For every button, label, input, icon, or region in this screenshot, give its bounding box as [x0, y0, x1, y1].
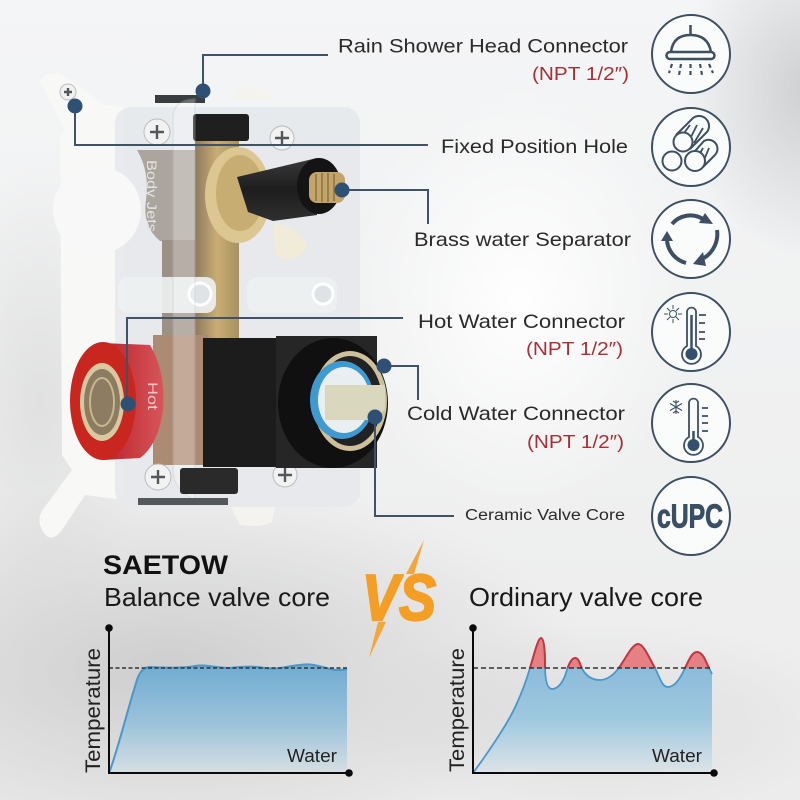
heading: SAETOW: SAETOW [103, 550, 229, 580]
label: fixed position hole: Fixed Position Hole [441, 136, 628, 158]
chart: balance valve temperature [82, 624, 353, 777]
VS emblem [362, 540, 436, 658]
label: npt cold: (NPT 1/2″) [527, 432, 624, 452]
chart: ordinary valve temperature [446, 624, 718, 777]
balance target line [109, 667, 348, 669]
icon: shower head [652, 15, 730, 93]
transparent housing [115, 107, 360, 507]
black round seat [278, 338, 388, 468]
top and bottom bracket ears [230, 87, 275, 526]
balance x label: Water [287, 746, 337, 766]
ordinary y label: Temperature [446, 648, 469, 772]
icon: cUPC badge [652, 477, 730, 555]
label: npt rain: (NPT 1/2″) [532, 64, 629, 84]
blue ring [310, 361, 374, 439]
top black connector [193, 114, 249, 141]
icon: cUPC badge: cUPC [657, 498, 723, 534]
VS emblem: VS [362, 561, 436, 634]
black mixer block [203, 338, 277, 467]
label: brass water separator: Brass water Separator [414, 229, 632, 251]
grey plate behind label [137, 150, 198, 241]
balance area [109, 664, 347, 773]
label: hot water connector: Hot Water Connector [418, 311, 626, 333]
ordinary x label: Water [652, 746, 702, 766]
icon: pipes [652, 108, 730, 186]
balance curve [109, 664, 347, 773]
hot label: Hot [145, 382, 161, 410]
phillips screws [60, 84, 297, 490]
brass pipe [195, 138, 239, 343]
leader dots [68, 84, 392, 424]
ordinary red curve [529, 637, 710, 668]
icon: hot thermometer [652, 293, 730, 371]
knockout discs [53, 166, 141, 254]
heading: ordinary valve core: Ordinary valve core [469, 582, 703, 612]
balance y label: Temperature [82, 648, 105, 773]
valve product photo illustration [39, 73, 388, 538]
balance axes [105, 624, 353, 777]
label: npt hot: (NPT 1/2″) [526, 339, 623, 359]
leader lines [75, 55, 454, 516]
body jets label: Body Jets [144, 160, 159, 232]
label: rain shower head connector: Rain Shower Head Connector [338, 36, 629, 58]
ordinary blue area [473, 638, 712, 773]
horizontal clear tubes [118, 277, 216, 313]
label: cold water connector: Cold Water Connector [407, 403, 626, 425]
icon: circular arrows [652, 200, 730, 278]
ceramic core stem [325, 385, 385, 420]
ordinary overshoot peaks [531, 639, 708, 668]
brass flange [205, 147, 271, 243]
brass spline [309, 172, 345, 203]
ordinary axes [469, 624, 718, 777]
brass nut [313, 351, 387, 451]
grey pipe [162, 240, 198, 340]
red hot port [103, 343, 163, 460]
bottom black connector [180, 468, 238, 494]
ordinary curve [473, 638, 712, 773]
clear vertical strip [173, 99, 195, 500]
black spindle [237, 158, 317, 221]
white mounting bracket [39, 73, 125, 538]
ordinary target line [473, 667, 713, 669]
heading: balance valve core: Balance valve core [104, 582, 330, 612]
copper lower body [153, 335, 208, 465]
label: ceramic valve core: Ceramic Valve Core [465, 507, 625, 524]
icon: cold thermometer [652, 384, 730, 462]
